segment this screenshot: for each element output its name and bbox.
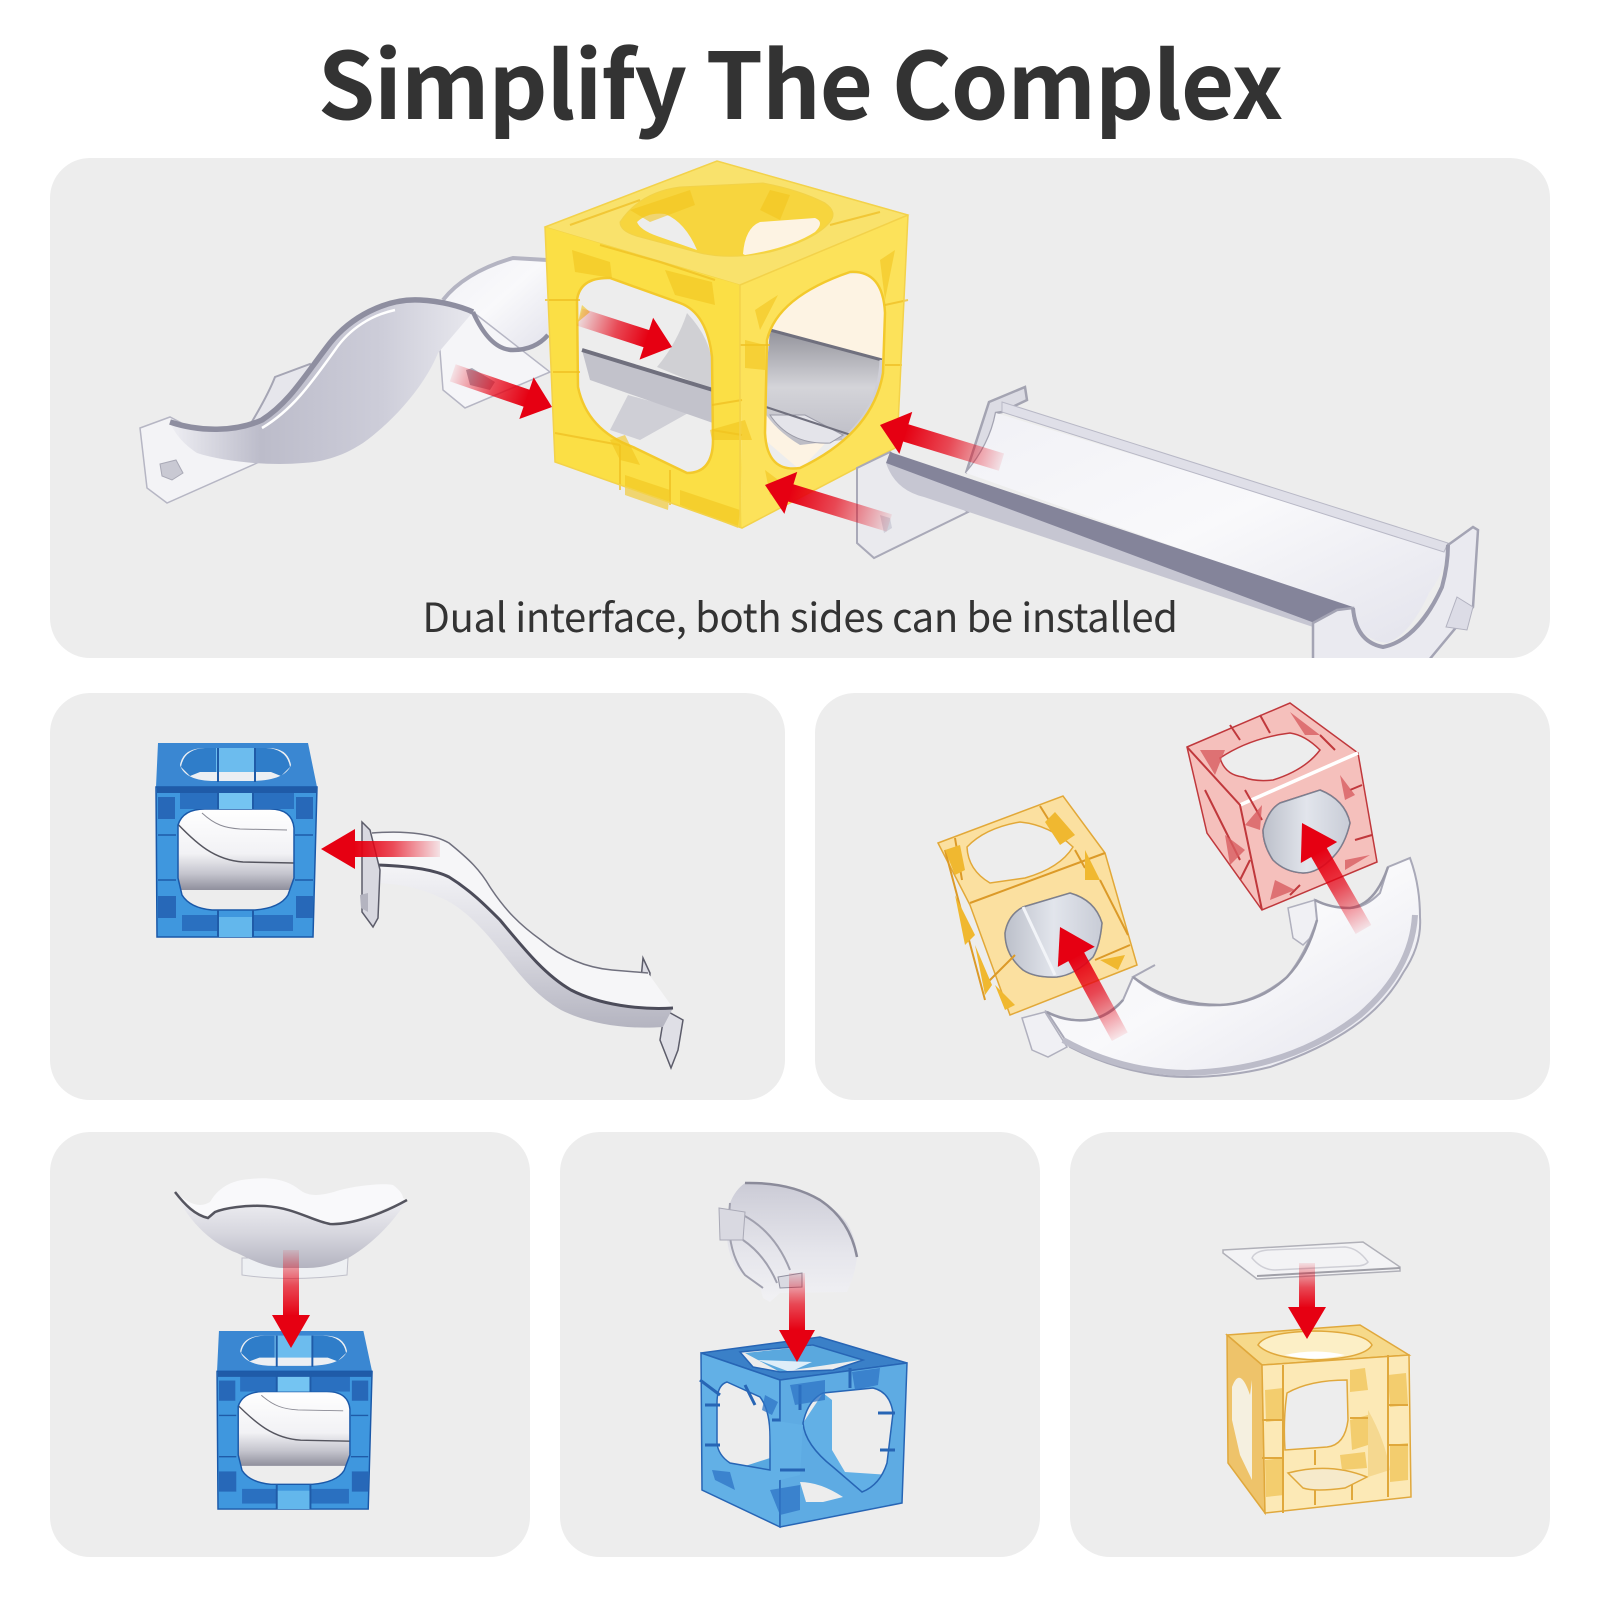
arrow: down into amber cube — [1288, 1263, 1326, 1339]
track: S curve slide — [140, 258, 550, 503]
track: U curve — [1022, 858, 1420, 1077]
track: descending S curve — [360, 822, 683, 1068]
funnel piece — [175, 1178, 407, 1278]
panel: dual interface — [50, 158, 1550, 660]
arrow: into red cube — [1284, 812, 1382, 940]
blue cube front view — [217, 1331, 372, 1509]
clear plate piece — [1223, 1242, 1400, 1279]
yellow cube — [545, 161, 908, 528]
blue cube isometric — [700, 1337, 907, 1527]
amber cube angled — [938, 796, 1137, 1015]
amber cube front view — [1227, 1325, 1411, 1513]
track: long straight trough — [857, 387, 1478, 660]
arrow: down into blue cube — [272, 1250, 310, 1348]
tube inside yellow cube — [582, 270, 885, 470]
arrow: right lower slot — [759, 464, 896, 544]
arrow: right upper slot — [874, 404, 1008, 483]
panel: curved track with amber and red cubes — [815, 693, 1550, 1100]
arrow: inner slot — [573, 296, 679, 368]
panel: funnel on blue cube — [50, 1132, 530, 1557]
arrow: down into blue cube — [779, 1273, 815, 1362]
curved chute piece — [719, 1183, 857, 1302]
panel: blue cube and S track — [50, 693, 785, 1100]
caption: Dual interface, both sides can be installed — [422, 586, 1178, 644]
arrow: into blue cube — [321, 829, 440, 869]
blue cube front view — [156, 743, 317, 937]
arrow: left slot — [446, 352, 559, 428]
title: Simplify The Complex — [318, 13, 1283, 146]
red cube angled — [1187, 703, 1377, 910]
panel: clear plate on amber cube — [1070, 1132, 1550, 1557]
arrow: into amber cube — [1042, 917, 1138, 1047]
panel: curved chute on blue cube — [560, 1132, 1040, 1557]
